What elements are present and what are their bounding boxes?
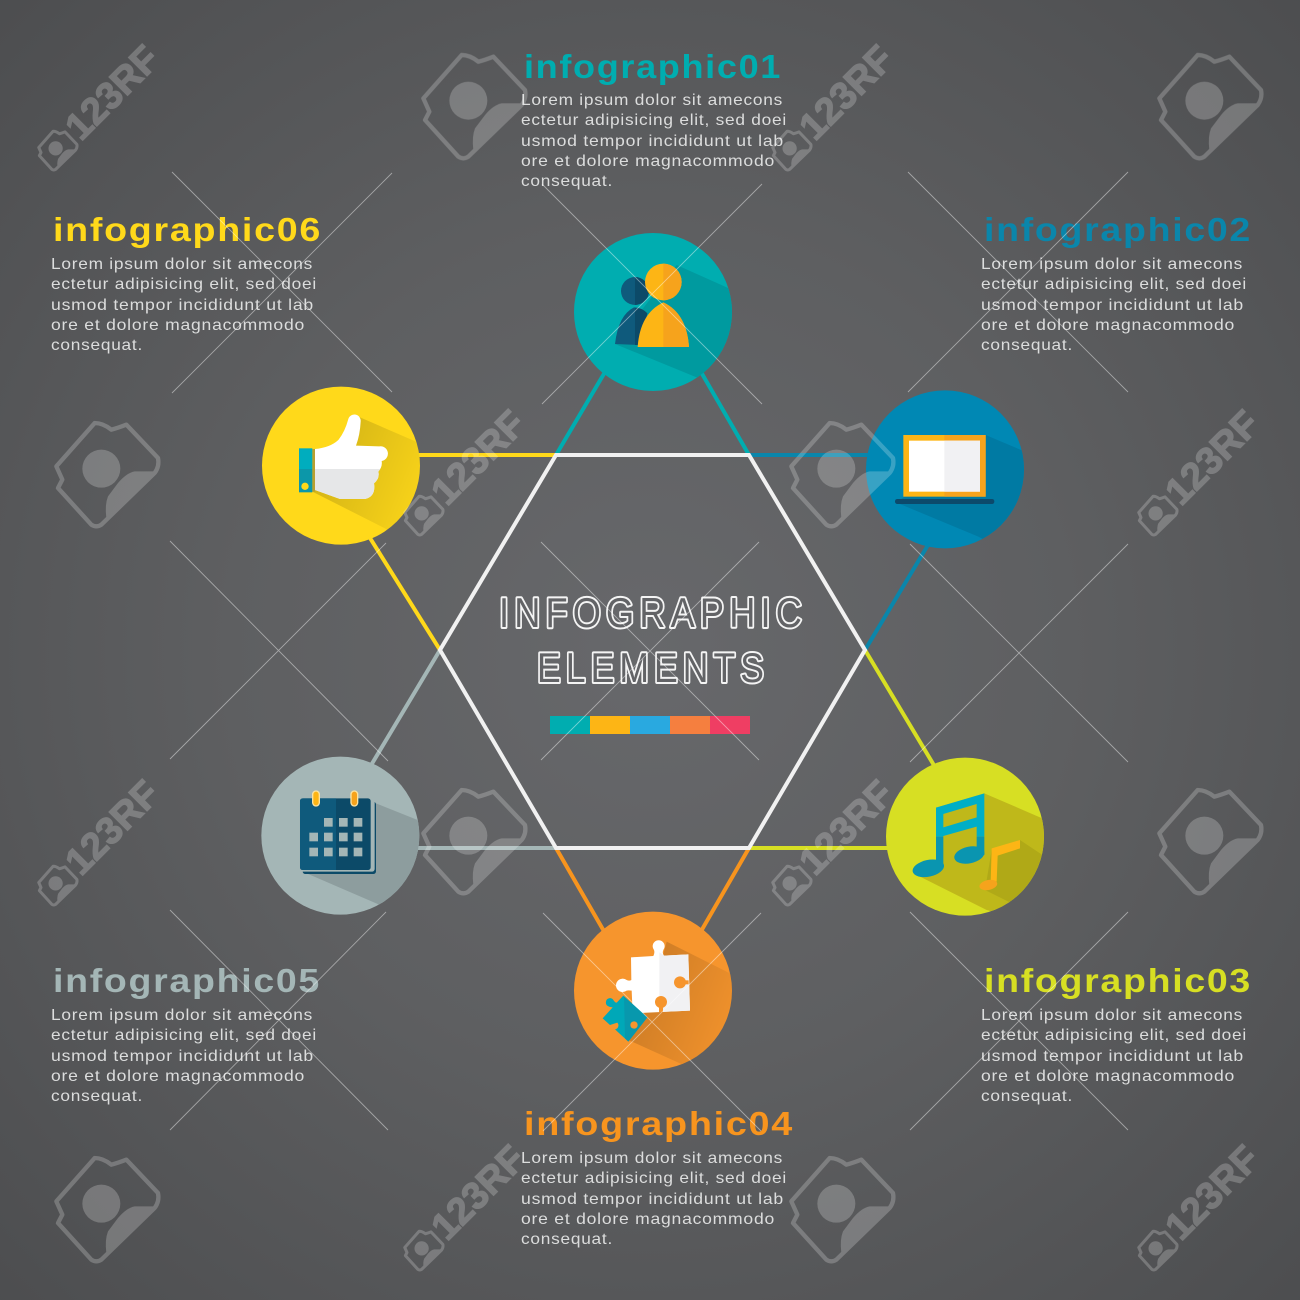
text block 04: Lorem ipsum dolor sit amecons [521, 1150, 783, 1167]
text block 03: ore et dolore magnacommodo [981, 1068, 1235, 1085]
text block 01: usmod tempor incididunt ut lab [521, 133, 784, 150]
text block 04: ectetur adipisicing elit, sed doei [521, 1170, 787, 1187]
circle 4: puzzle icon [574, 912, 732, 1070]
watermark eggs and logos: 123RF [1158, 403, 1268, 513]
text block 01: ore et dolore magnacommodo [521, 153, 775, 170]
text block 02: usmod tempor incididunt ut lab [981, 297, 1244, 314]
text block 05: ore et dolore magnacommodo [51, 1068, 305, 1085]
text block 06: usmod tempor incididunt ut lab [51, 297, 314, 314]
circle 3: music notes icon [886, 758, 1050, 927]
colour bar [550, 716, 750, 734]
text block 05: Lorem ipsum dolor sit amecons [51, 1007, 313, 1024]
text block 01 [521, 48, 787, 190]
text block 06: ore et dolore magnacommodo [51, 317, 305, 334]
text block 06: infographic06 [53, 211, 322, 248]
text block 02: ectetur adipisicing elit, sed doei [981, 276, 1247, 293]
text block 06: ectetur adipisicing elit, sed doei [51, 276, 317, 293]
text block 02: consequat. [981, 337, 1073, 354]
watermark eggs and logos: 123RF [424, 1138, 534, 1248]
text block 01: Lorem ipsum dolor sit amecons [521, 92, 783, 109]
circle 5: calendar icon [261, 756, 420, 915]
circle 2: laptop icon [866, 390, 1024, 548]
text block 02: Lorem ipsum dolor sit amecons [981, 256, 1243, 273]
text block 01: ectetur adipisicing elit, sed doei [521, 112, 787, 129]
text block 01: consequat. [521, 173, 613, 190]
watermark eggs and logos: 123RF [58, 773, 168, 883]
circle 6: thumbs up icon [262, 386, 420, 545]
text block 03: consequat. [981, 1088, 1073, 1105]
text block 03 [981, 962, 1252, 1105]
text block 04: ore et dolore magnacommodo [521, 1211, 775, 1228]
text block 03: Lorem ipsum dolor sit amecons [981, 1007, 1243, 1024]
center title: INFOGRAPHIC [499, 589, 807, 636]
text block 05: ectetur adipisicing elit, sed doei [51, 1027, 317, 1044]
text block 06: consequat. [51, 337, 143, 354]
text block 03: infographic03 [984, 962, 1252, 999]
watermark eggs and logos: 123RF [58, 38, 168, 148]
text block 02 [981, 211, 1252, 354]
center title: ELEMENTS [537, 644, 769, 691]
text block 01: infographic01 [524, 48, 782, 85]
watermark eggs and logos: 123RF [792, 38, 902, 148]
text block 03: ectetur adipisicing elit, sed doei [981, 1027, 1247, 1044]
text block 05: infographic05 [53, 962, 321, 999]
text block 04 [521, 1105, 794, 1248]
watermark eggs and logos: 123RF [424, 403, 534, 513]
watermark cross lines [170, 172, 1128, 1131]
text block 04: usmod tempor incididunt ut lab [521, 1191, 784, 1208]
text block 04: infographic04 [524, 1105, 794, 1142]
text block 06: Lorem ipsum dolor sit amecons [51, 256, 313, 273]
text block 05: usmod tempor incididunt ut lab [51, 1048, 314, 1065]
text block 02: infographic02 [984, 211, 1252, 248]
watermark eggs and logos: 123RF [792, 773, 902, 883]
text block 05 [51, 962, 321, 1105]
circle 1: people icon [574, 233, 732, 391]
text block 06 [51, 211, 322, 354]
watermark eggs and logos: 123RF [1158, 1138, 1268, 1248]
text block 02: ore et dolore magnacommodo [981, 317, 1235, 334]
center title [499, 589, 807, 691]
text block 04: consequat. [521, 1231, 613, 1248]
hexagon [440, 455, 865, 848]
text block 03: usmod tempor incididunt ut lab [981, 1048, 1244, 1065]
connector lines and hexagon [370, 372, 935, 933]
text block 05: consequat. [51, 1088, 143, 1105]
